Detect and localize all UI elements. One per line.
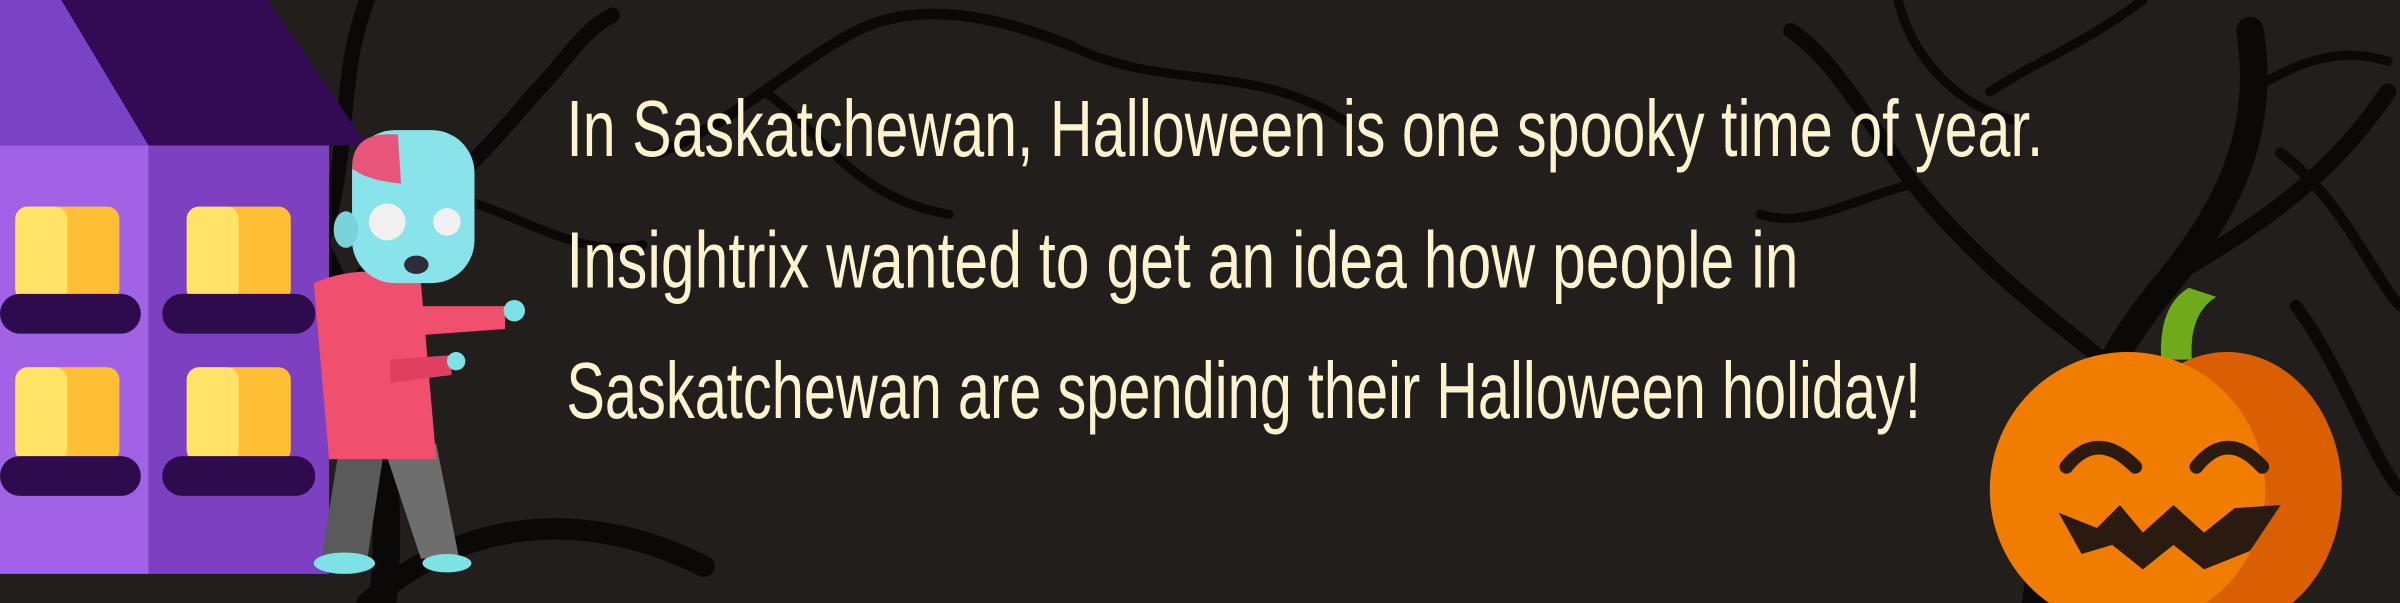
intro text: Saskatchewan are spending their Halloween holiday!: [566, 346, 1921, 435]
pumpkin: [1990, 288, 2342, 603]
intro text: [566, 84, 2043, 435]
zombie: [314, 130, 525, 574]
windows: [15, 207, 119, 302]
intro text: Insightrix wanted to get an idea how people in: [566, 216, 1798, 305]
house: [0, 0, 367, 574]
